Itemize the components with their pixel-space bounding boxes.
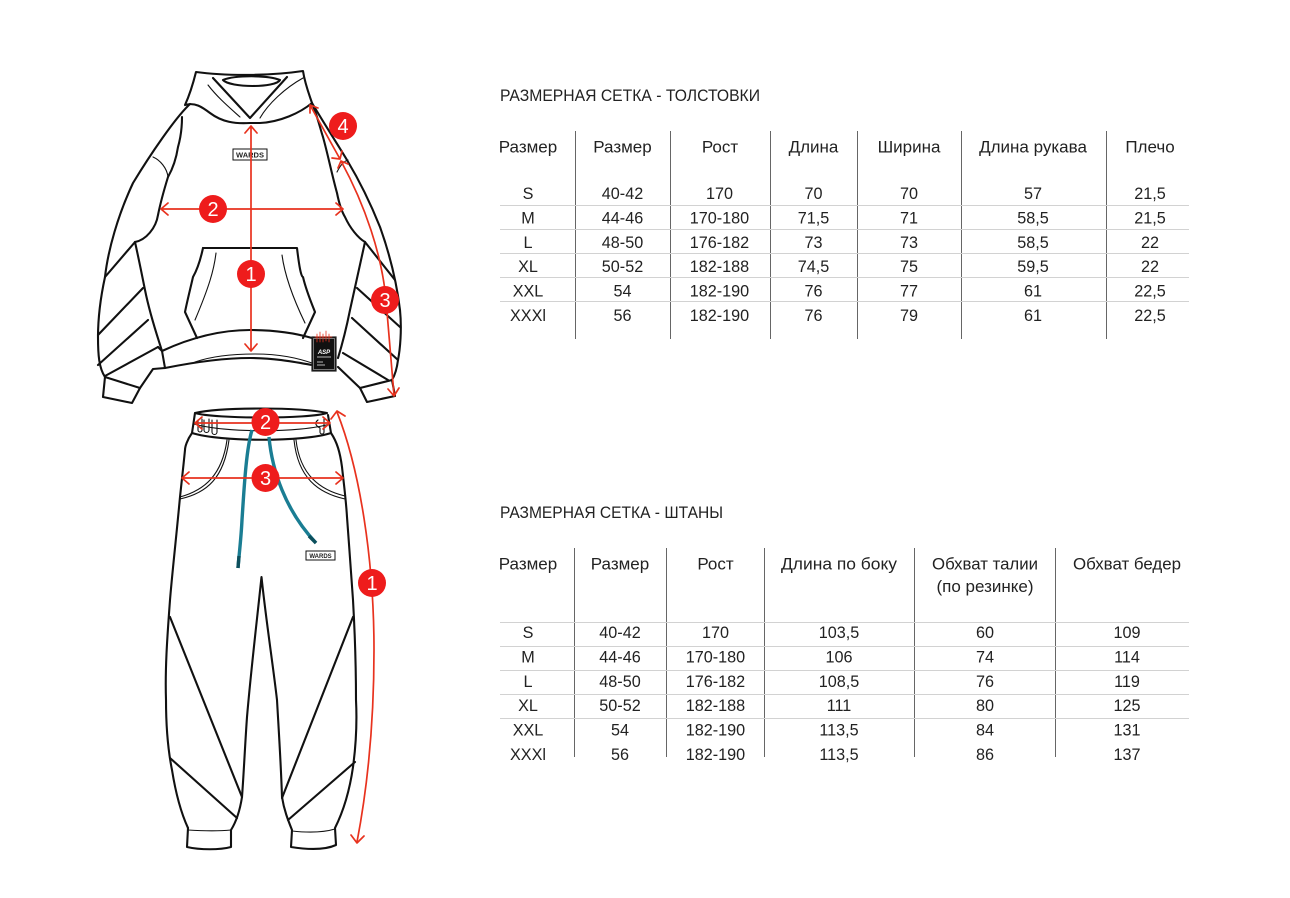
table header: Обхват бедер <box>1073 554 1181 574</box>
measure 2: hoodie width <box>161 195 343 223</box>
row XL: XL <box>518 697 538 715</box>
black hem label: ASP <box>317 350 331 356</box>
row M: 44-46 <box>599 648 641 666</box>
measure 1: hoodie length <box>237 126 265 351</box>
row XXXl: 137 <box>1113 746 1141 764</box>
row XXL: 131 <box>1113 722 1141 740</box>
row M: 170-180 <box>686 648 745 666</box>
row L: 48-50 <box>599 673 641 691</box>
row XXL: 182-190 <box>686 722 745 740</box>
row L: L <box>523 234 533 252</box>
row S: 70 <box>804 185 823 203</box>
row M <box>521 210 1166 228</box>
row XXXl: 113,5 <box>819 746 859 764</box>
measure 3: hips <box>182 464 343 492</box>
row L: 108,5 <box>819 673 859 691</box>
row L <box>523 234 1159 252</box>
row XL: 50-52 <box>602 258 643 276</box>
row XXXl: XXXl <box>510 746 546 764</box>
measure 1: hoodie length: 1 <box>245 264 257 286</box>
row M: M <box>521 210 535 228</box>
measure 3: sleeve length: 3 <box>379 290 391 312</box>
row XXL: 77 <box>900 282 918 300</box>
table header: (по резинке) <box>936 577 1034 596</box>
row XXL: XXL <box>513 282 543 300</box>
row M: 74 <box>976 648 994 666</box>
row XXXl: 56 <box>611 746 629 764</box>
black hem label <box>312 331 336 371</box>
table header: Длина <box>789 138 839 156</box>
row L: 176-182 <box>690 234 749 252</box>
illustration: hoodie with measurements <box>98 71 401 403</box>
row S: 70 <box>900 185 918 203</box>
table header: Размер <box>499 138 557 156</box>
measure 1: side length: 1 <box>366 573 378 595</box>
row S <box>523 185 1166 203</box>
row S: 170 <box>702 624 729 642</box>
drawstrings <box>238 430 316 568</box>
row XL: 111 <box>827 697 851 715</box>
row XXL: 54 <box>611 722 629 740</box>
hoodie outline <box>98 71 401 403</box>
table header: Ширина <box>878 138 941 156</box>
row XXXl: 76 <box>804 307 823 325</box>
row S: 60 <box>976 624 994 642</box>
row M: 71,5 <box>798 210 829 228</box>
row XXL: 84 <box>976 722 994 740</box>
row S: 40-42 <box>599 624 641 642</box>
measure 2: waist: 2 <box>260 412 271 434</box>
measure 3: hips: 3 <box>260 468 271 490</box>
row M: M <box>521 648 535 666</box>
row M: 106 <box>825 648 853 666</box>
row XXL: 22,5 <box>1134 282 1166 300</box>
row M: 114 <box>1114 648 1140 666</box>
table header: Плечо <box>1125 138 1175 156</box>
table header: Размер <box>499 554 557 574</box>
row M: 21,5 <box>1134 210 1166 228</box>
row XL: 59,5 <box>1017 258 1049 276</box>
table header: Обхват талии <box>932 554 1038 574</box>
row S: 103,5 <box>819 624 859 642</box>
row XXXl: 56 <box>613 307 632 325</box>
row M: 170-180 <box>690 210 749 228</box>
row L: 73 <box>900 234 918 252</box>
row XXXl: 182-190 <box>686 746 745 764</box>
row XL: 125 <box>1113 697 1141 715</box>
table header: Размер <box>593 138 652 156</box>
table header <box>499 138 1175 156</box>
pants outline <box>166 408 356 849</box>
row XXXl: 86 <box>976 746 994 764</box>
row XXL: 182-190 <box>690 282 749 300</box>
pants logo tag <box>306 551 335 560</box>
row XXL: 54 <box>613 282 632 300</box>
row M <box>521 648 1140 666</box>
row XXXl: 182-190 <box>690 307 749 325</box>
row XL: 22 <box>1141 258 1159 276</box>
row XL: 50-52 <box>599 697 641 715</box>
table header <box>499 554 1181 596</box>
measure 4: shoulder <box>310 105 357 159</box>
row XXL <box>513 282 1166 300</box>
table header: Рост <box>702 138 738 156</box>
row S: 40-42 <box>602 185 643 203</box>
row XL: 182-188 <box>686 697 745 715</box>
table header: Длина рукава <box>979 138 1087 156</box>
table header: Рост <box>697 554 734 574</box>
row S: 109 <box>1113 624 1141 642</box>
row L: 176-182 <box>686 673 745 691</box>
illustration: pants with measurements <box>166 408 386 849</box>
measure 2: waist <box>195 408 330 436</box>
row XXXl: 79 <box>900 307 918 325</box>
table: pants <box>499 548 1189 764</box>
row L: 76 <box>976 673 994 691</box>
row L: 73 <box>804 234 823 252</box>
row XXXl: XXXl <box>510 307 546 325</box>
row XXL: XXL <box>513 722 543 740</box>
measure 4: shoulder: 4 <box>337 116 349 138</box>
row XXXl: 22,5 <box>1134 307 1166 325</box>
row XL: 80 <box>976 697 994 715</box>
row S: 21,5 <box>1134 185 1166 203</box>
row XXL <box>513 722 1141 740</box>
table: hoodies <box>499 131 1189 339</box>
heading: hoodies size chart: РАЗМЕРНАЯ СЕТКА - ТОЛСТОВКИ <box>500 86 760 105</box>
chest logo tag: WARDS <box>236 150 264 160</box>
row S <box>523 624 1141 642</box>
row XL: 75 <box>900 258 918 276</box>
row L: L <box>523 673 533 691</box>
measure 3: sleeve length <box>338 161 399 396</box>
row XL: 182-188 <box>690 258 749 276</box>
row L: 48-50 <box>602 234 643 252</box>
row S: 170 <box>706 185 733 203</box>
row L <box>523 673 1140 691</box>
row M: 44-46 <box>602 210 643 228</box>
pants logo tag: WARDS <box>309 554 332 560</box>
row XL <box>518 697 1141 715</box>
table header: Длина по боку <box>781 554 898 574</box>
row M: 71 <box>900 210 918 228</box>
row M: 58,5 <box>1017 210 1049 228</box>
row L: 119 <box>1114 673 1140 691</box>
row XXXl <box>510 746 1141 764</box>
measure 1: side length <box>331 411 386 843</box>
row L: 22 <box>1141 234 1159 252</box>
measure 2: hoodie width: 2 <box>207 199 219 221</box>
row XXL: 61 <box>1024 282 1042 300</box>
chest logo tag <box>233 149 267 160</box>
row L: 58,5 <box>1017 234 1049 252</box>
row XL: 74,5 <box>798 258 829 276</box>
row XL: XL <box>518 258 538 276</box>
row XXXl <box>510 307 1166 325</box>
row XXL: 113,5 <box>819 722 859 740</box>
row S: 57 <box>1024 185 1042 203</box>
table header: Размер <box>591 554 649 574</box>
heading: pants size chart: РАЗМЕРНАЯ СЕТКА - ШТАНЫ <box>500 503 723 522</box>
row XL <box>518 258 1159 276</box>
row S: S <box>523 624 534 642</box>
row XXXl: 61 <box>1024 307 1042 325</box>
row S: S <box>523 185 534 203</box>
row XXL: 76 <box>804 282 823 300</box>
